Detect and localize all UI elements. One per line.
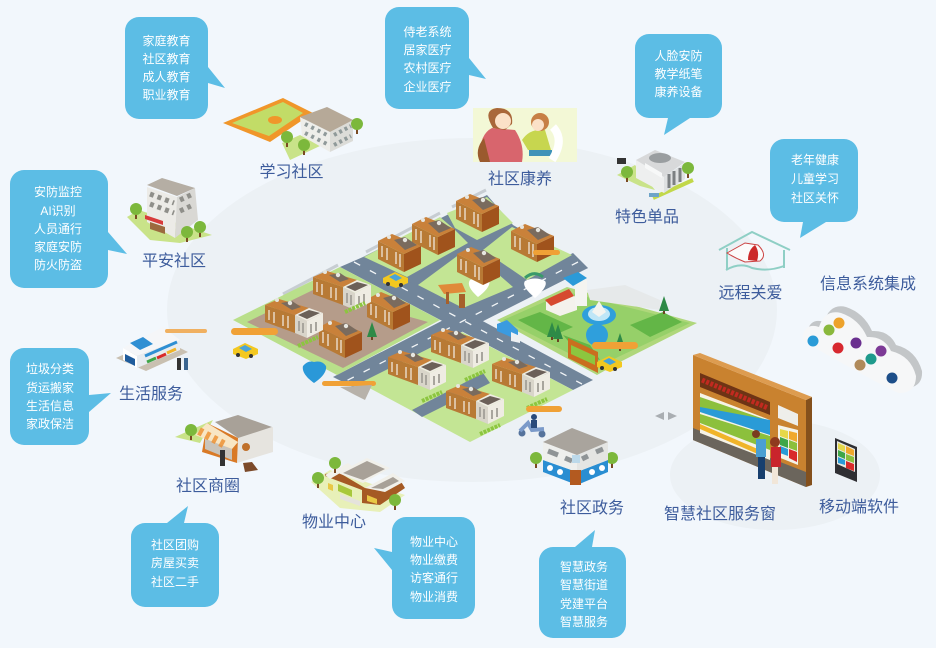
- bubble: 社区康养: [385, 7, 486, 109]
- label: 社区康养: 社区康养: [488, 170, 552, 188]
- icon: cloud: [803, 306, 922, 393]
- bubble: 社区康养: 企业医疗: [403, 79, 452, 94]
- road: main north-west to south-east: [340, 257, 593, 390]
- gate: [340, 385, 372, 400]
- road: main north-east to south-west: [333, 253, 588, 387]
- bubble: 学习社区: 职业教育: [142, 87, 191, 102]
- green block: top: [447, 197, 513, 240]
- bubble: 社区政务: 智慧服务: [560, 614, 608, 629]
- bubble: 社区商圈: [131, 506, 219, 607]
- green block: bottom: [360, 332, 573, 442]
- isometric community map: [231, 190, 697, 442]
- icon: 远程关爱 house logo: [719, 232, 790, 270]
- bubble: 学习社区: 社区教育: [142, 51, 191, 66]
- label: 社区商圈: 社区商圈: [176, 477, 240, 495]
- icon: service kiosk: [693, 353, 812, 487]
- bubble: 学习社区: [125, 17, 225, 119]
- background ellipse: community: [167, 138, 777, 482]
- green block: brown lot: [233, 267, 440, 375]
- bubble: 社区商圈: 社区二手: [151, 574, 199, 589]
- bubble: 平安社区: 防火防盗: [34, 257, 82, 272]
- park kiosk: [568, 338, 598, 373]
- label: 学习社区: 学习社区: [259, 163, 324, 181]
- bubble: 生活服务: 家政保洁: [26, 416, 74, 431]
- bubble: 社区康养: 居家医疗: [403, 42, 452, 57]
- bubble: 生活服务: 货运搬家: [26, 380, 74, 395]
- bubble: 远程关爱: 社区关怀: [791, 190, 839, 205]
- green arch: [525, 274, 543, 278]
- taxi: park: [597, 356, 622, 372]
- taxi: left: [233, 343, 258, 359]
- bubble: 特色单品: 康养设备: [654, 84, 703, 99]
- green block: top right: [483, 227, 572, 280]
- pavilion: [438, 283, 466, 308]
- bubble: 社区商圈: 社区团购: [151, 537, 199, 552]
- road base: top quadrant: [363, 195, 588, 322]
- road: bottom branch: [412, 373, 490, 417]
- bubble: 平安社区: 家庭安防: [34, 239, 82, 254]
- bubble: 社区政务: [539, 530, 626, 638]
- icon: 特色单品 hospital: [617, 150, 694, 198]
- label: 物业中心: 物业中心: [302, 513, 366, 531]
- park house: [545, 272, 587, 316]
- bubble: 平安社区: 安防监控: [34, 184, 82, 199]
- truck: [497, 320, 520, 343]
- taxi: road: [383, 272, 408, 288]
- bubble: 社区商圈: 房屋买卖: [151, 555, 199, 570]
- green block: centre diamond: [418, 248, 513, 308]
- icon: mobile app phone: [835, 438, 857, 482]
- buildings: [456, 194, 499, 232]
- bubble: 社区政务: 智慧街道: [560, 577, 608, 592]
- bubble: 生活服务: 生活信息: [26, 398, 74, 413]
- bubble: 生活服务: 垃圾分类: [26, 361, 74, 376]
- road dashes: [346, 262, 582, 384]
- bubble: 学习社区: 成人教育: [142, 69, 191, 84]
- background ellipse: kiosk: [670, 420, 880, 530]
- bubble: 社区政务: 党建平台: [560, 596, 608, 611]
- icon: 生活服务 shop: [116, 327, 207, 371]
- orange tags: [231, 250, 638, 412]
- outer sidewalk strips: [283, 190, 486, 294]
- white location drops: [469, 278, 546, 298]
- bubble: 远程关爱: 老年健康: [791, 152, 839, 167]
- bubble: 物业中心: 访客通行: [410, 570, 458, 585]
- blue location pin: [303, 362, 326, 383]
- icon: 学习社区 court and school: [223, 98, 363, 160]
- label: 信息系统集成: 信息系统集成: [820, 275, 916, 293]
- bubble: 特色单品: 人脸安防: [654, 48, 703, 63]
- bubble: 社区政务: 智慧政务: [560, 559, 608, 574]
- bubble: 物业中心: [374, 517, 475, 619]
- park ground: [497, 287, 697, 375]
- bubble: 平安社区: [10, 170, 127, 288]
- blue dome: [586, 324, 608, 346]
- label: 生活服务: 生活服务: [119, 385, 183, 403]
- fountain: [582, 301, 616, 325]
- label: 社区政务: 社区政务: [560, 499, 624, 517]
- icon: 平安社区 building: [127, 178, 212, 243]
- bubble: 特色单品: 教学纸笔: [654, 66, 703, 81]
- bubble: 特色单品: [635, 34, 722, 135]
- park wall: [587, 285, 660, 310]
- icon: 社区商圈 shop: [175, 415, 273, 472]
- bubble: 物业中心: 物业中心: [410, 534, 458, 549]
- hedges: [298, 337, 318, 346]
- icon: 社区政务 police station: [530, 428, 618, 485]
- label: 特色单品: 特色单品: [615, 208, 679, 226]
- bubble: 远程关爱: [770, 139, 858, 238]
- bubble: 远程关爱: 儿童学习: [791, 171, 839, 186]
- green block: top left: [364, 217, 468, 277]
- bubble: 社区康养: 侍老系统: [403, 25, 452, 39]
- label: 远程关爱: 远程关爱: [718, 284, 783, 302]
- bubble: 物业中心: 物业缴费: [410, 552, 458, 567]
- people at kiosk: [752, 430, 781, 484]
- bubble: 物业中心: 物业消费: [410, 590, 458, 604]
- bubble: 社区康养: 农村医疗: [403, 61, 452, 75]
- label: 平安社区: 平安社区: [142, 252, 206, 270]
- label: 移动端软件: 移动端软件: [819, 498, 899, 516]
- pine trees: [367, 322, 377, 340]
- paved lot: [247, 290, 428, 368]
- bubble: 学习社区: 家庭教育: [142, 33, 191, 48]
- bubble: 平安社区: 人员通行: [34, 222, 82, 236]
- icon: 社区康养 illustration: [473, 108, 577, 162]
- bubble: 平安社区: AI识别: [40, 204, 76, 218]
- bubble: 生活服务: [10, 348, 111, 445]
- scooter: [518, 414, 546, 438]
- label: 智慧社区服务窗: 智慧社区服务窗: [664, 505, 776, 523]
- arrows: left right: [655, 412, 677, 420]
- icon: 物业中心 building: [311, 457, 405, 512]
